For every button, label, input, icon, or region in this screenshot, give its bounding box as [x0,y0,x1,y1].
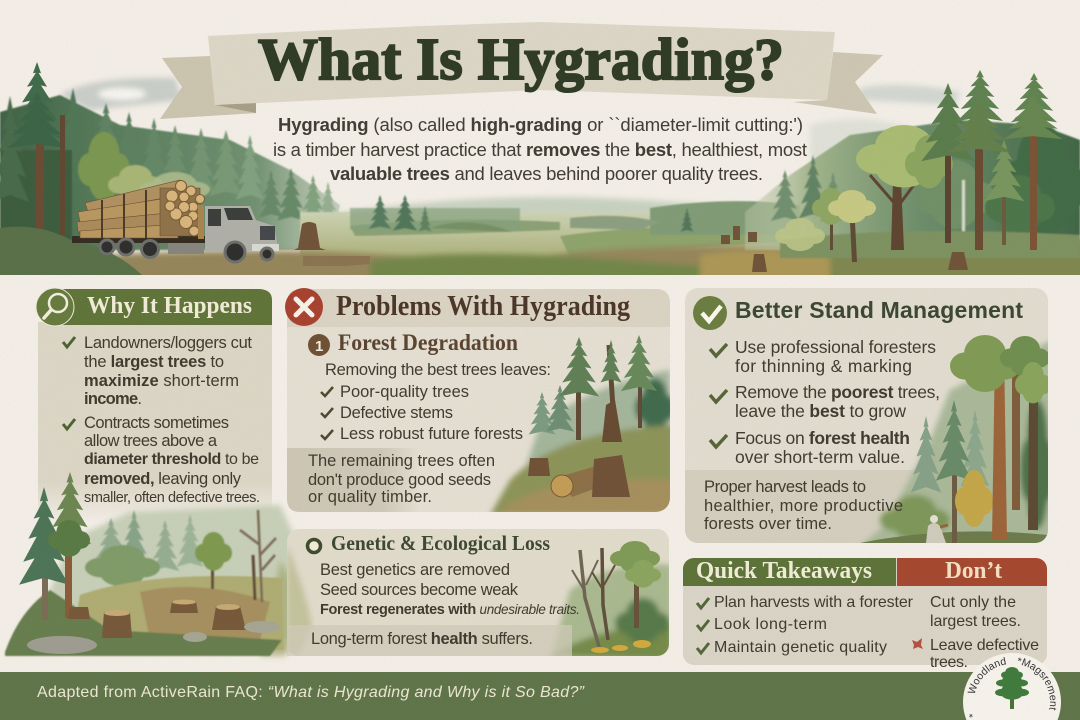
meadow and rolling fields [300,195,800,262]
bullet list: Landowners/loggers cut [84,334,252,352]
bullet list: diameter threshold to be [84,451,259,468]
wheels [100,239,273,262]
footer band [0,672,1080,720]
do list: Plan harvests with a forester [714,594,914,611]
distant clouds and hills [60,76,960,212]
logging truck with logs [72,180,279,262]
degradation text: don't produce good seeds [308,471,491,489]
left background forest [0,88,340,250]
subheading: forest degradation: 1 [315,338,323,355]
degradation text: Removing the best trees leaves: [325,361,551,379]
title text: What Is Hygrading? [258,26,784,92]
left foreground trees [7,62,67,242]
icon: magnifying glass [36,288,74,326]
heading: Genetic & Ecological Loss [331,531,550,555]
panel body [38,322,272,522]
don't list [912,594,1039,671]
band [685,470,925,543]
do list: Look long-term [714,616,827,633]
bullet list [63,334,260,506]
do list [697,594,914,656]
footer band: Adapted from ActiveRain FAQ: “What is Hygrading and Why is it So Bad?” [37,684,585,701]
bullets: healthier, more productive [704,497,903,515]
subheading: forest degradation: Forest Degradation [338,330,518,355]
degradation text: Poor-quality trees [340,383,469,401]
lower band [287,448,500,512]
bullets: Proper harvest leads to [704,478,866,496]
bullet list: smaller, often defective trees. [84,490,260,506]
heading: don't: Don’t [945,558,1002,584]
intro paragraph: is a timber harvest practice that removes the best, healthiest, most [273,139,807,160]
degradation text: or quality timber. [308,488,432,506]
text: Long-term forest health suffers. [311,630,533,648]
banner right tail [793,52,883,114]
icon: red x [285,288,323,326]
text: Seed sources become weak [320,581,519,599]
heading: Why It Happens [87,293,252,319]
foreground shrubs [0,227,145,278]
right foreground trees [775,70,1063,262]
degradation text: The remaining trees often [308,452,495,470]
right background forest [745,120,1080,258]
don't list: Leave defective [930,637,1039,654]
degradation text [308,361,551,506]
text: Best genetics are removed [320,561,510,579]
degradation text: Less robust future forests [340,425,523,443]
bullet list: Contracts sometimes [84,414,229,432]
bullets: Focus on forest health [735,428,910,448]
header strip [287,289,670,327]
heading: Better Stand Management [735,297,1023,323]
left forest scene with stumps [30,505,310,656]
lower band [287,625,572,656]
intro paragraph: valuable trees and leaves behind poorer quality trees. [330,163,763,184]
degradation text: Defective stems [340,404,453,422]
icon: tree [995,667,1029,709]
bullets: for thinning & marking [735,356,912,376]
bullets: leave the best to grow [735,401,906,421]
cab [205,206,278,252]
heading: Problems With Hygrading [336,291,630,322]
left haze from forest scene [287,545,312,656]
banner left tail [160,56,256,119]
icon: ring bullet [308,540,320,552]
bullets [704,337,940,533]
badge: woodland management service seal [963,653,1061,720]
hero forest landscape illustration [0,62,1080,290]
panel: better stand management [685,288,1055,546]
don't list: trees. [930,654,968,671]
bullet list: the largest trees to [84,353,224,371]
logs [77,180,200,238]
panel: genetic and ecological loss [287,529,672,660]
icon: check badge [693,296,727,330]
don't list: Cut only the [930,594,1016,611]
bullets: Remove the poorest trees, [735,382,940,402]
intro paragraph: Hygrading (also called high-grading or ``diameter-limit cutting:') [278,114,803,135]
text: Forest regenerates with undesirable traits. [320,602,580,618]
heading: quick takeaways: Quick Takeaways [696,558,872,584]
bullet list: income. [84,390,142,408]
ground [112,236,1080,275]
stumps in clearing [294,222,968,272]
genetic loss scene [550,564,672,660]
don't list: largest trees. [930,613,1021,630]
bullets: over short-term value. [735,447,905,467]
bullet list: removed, leaving only [84,470,242,488]
title banner [160,22,883,119]
do list: Maintain genetic quality [714,639,887,656]
banner ribbon [208,22,835,105]
bullets: Use professional foresters [735,337,936,357]
icon: check [63,337,75,347]
intro paragraph [273,114,807,184]
forester figure [926,515,948,543]
bullet list: maximize short-term [84,372,239,390]
panel: why it happens [5,288,310,656]
bullet list: allow trees above a [84,432,218,450]
header ribbon [55,289,272,325]
bullets: forests over time. [704,515,832,533]
forest degradation scene [490,370,675,515]
panel: problems with hygrading [285,288,675,515]
text [311,561,580,648]
icon: check [63,419,75,429]
panel: quick takeaways and don't [683,558,1047,671]
managed forest scene [860,340,1055,546]
